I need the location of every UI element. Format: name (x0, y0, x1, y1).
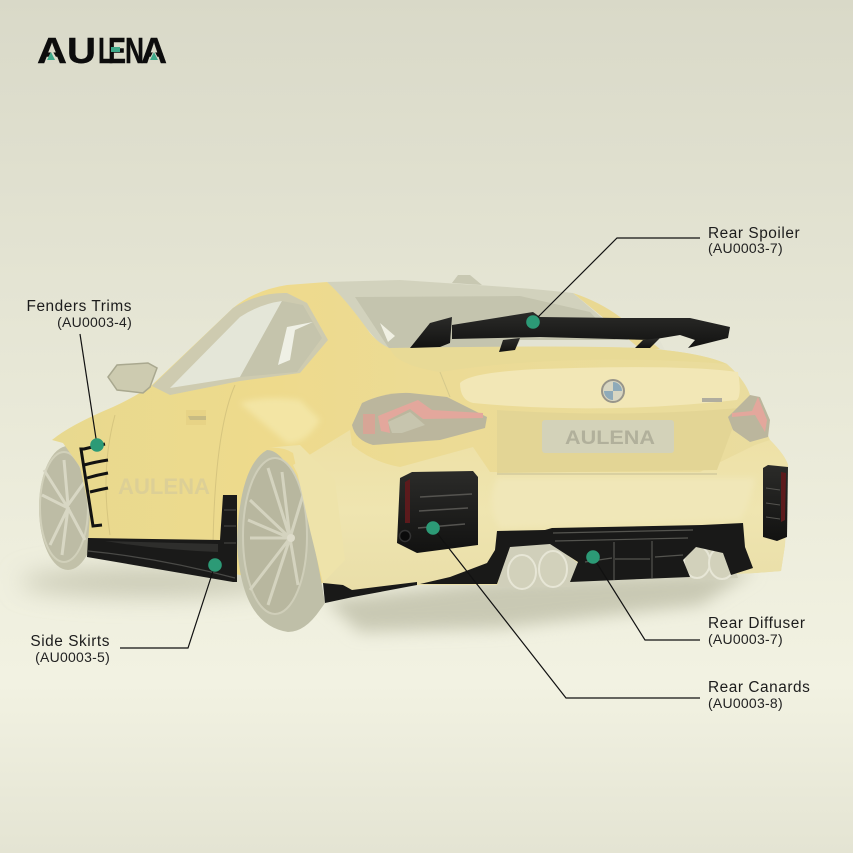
car: roof and rear glass (327, 275, 665, 350)
logo: AULENA: A (37, 30, 67, 71)
leader line: rear spoiler (533, 238, 700, 322)
logo: AULENA: U (67, 30, 96, 71)
part: rear diffuser (420, 523, 753, 584)
part: rear spoiler (410, 312, 730, 352)
logo: AULENA: E (108, 30, 126, 71)
part: fender trims (81, 444, 108, 526)
part: exhaust surrounds and tips (497, 543, 738, 589)
label: rear spoiler: Rear Spoiler (708, 225, 800, 242)
car: door details (106, 385, 320, 545)
label: rear canards: Rear Canards (708, 679, 810, 696)
leader line: fender trims (80, 334, 97, 445)
marker dots (90, 315, 600, 572)
leader line: side skirts (120, 565, 215, 648)
door watermark: AULENA (118, 474, 210, 499)
label: rear canards (708, 679, 810, 711)
car: rear fender edge (264, 445, 345, 583)
car: left tail light (352, 393, 487, 445)
car: right tail light (728, 395, 770, 442)
label: fender trims: (AU0003-4) (57, 314, 132, 330)
label: side skirts: (AU0003-5) (35, 649, 110, 665)
logo: AULENA: N (125, 30, 144, 71)
label: rear spoiler (708, 225, 800, 256)
car: front wheel (39, 446, 97, 570)
label: rear diffuser: (AU0003-7) (708, 631, 783, 647)
logo: AULENA: L (98, 30, 113, 71)
car: body silhouette (52, 282, 788, 592)
label: rear diffuser (708, 615, 806, 647)
logo: AULENA (37, 30, 167, 71)
label: side skirts: Side Skirts (30, 633, 110, 650)
label: rear diffuser: Rear Diffuser (708, 615, 806, 632)
part: left rear canard (397, 471, 478, 553)
label: rear canards: (AU0003-8) (708, 695, 783, 711)
label: rear spoiler: (AU0003-7) (708, 240, 783, 256)
car: deck and trunk surfaces (390, 346, 755, 528)
part: right rear canard (763, 465, 788, 541)
leader line: rear canards (433, 528, 700, 698)
car: mirror (108, 363, 157, 393)
ground shadow (20, 568, 755, 632)
label: fender trims: Fenders Trims (26, 298, 132, 315)
car: rear wheel (237, 450, 325, 632)
car: license plate with watermark: AULENA (565, 428, 655, 449)
label: side skirts (30, 633, 110, 665)
leader line: rear diffuser (593, 557, 700, 640)
logo: AULENA: A (141, 30, 167, 71)
car: BMW badge (602, 380, 624, 402)
part: side skirts (87, 495, 237, 582)
car: side windows (152, 293, 328, 395)
car: M2 badge (702, 398, 722, 402)
label: fender trims (26, 298, 132, 330)
car: license plate with watermark (542, 420, 674, 453)
part: lower corner splitter (323, 582, 417, 603)
car: rear bumper panel (293, 430, 788, 592)
